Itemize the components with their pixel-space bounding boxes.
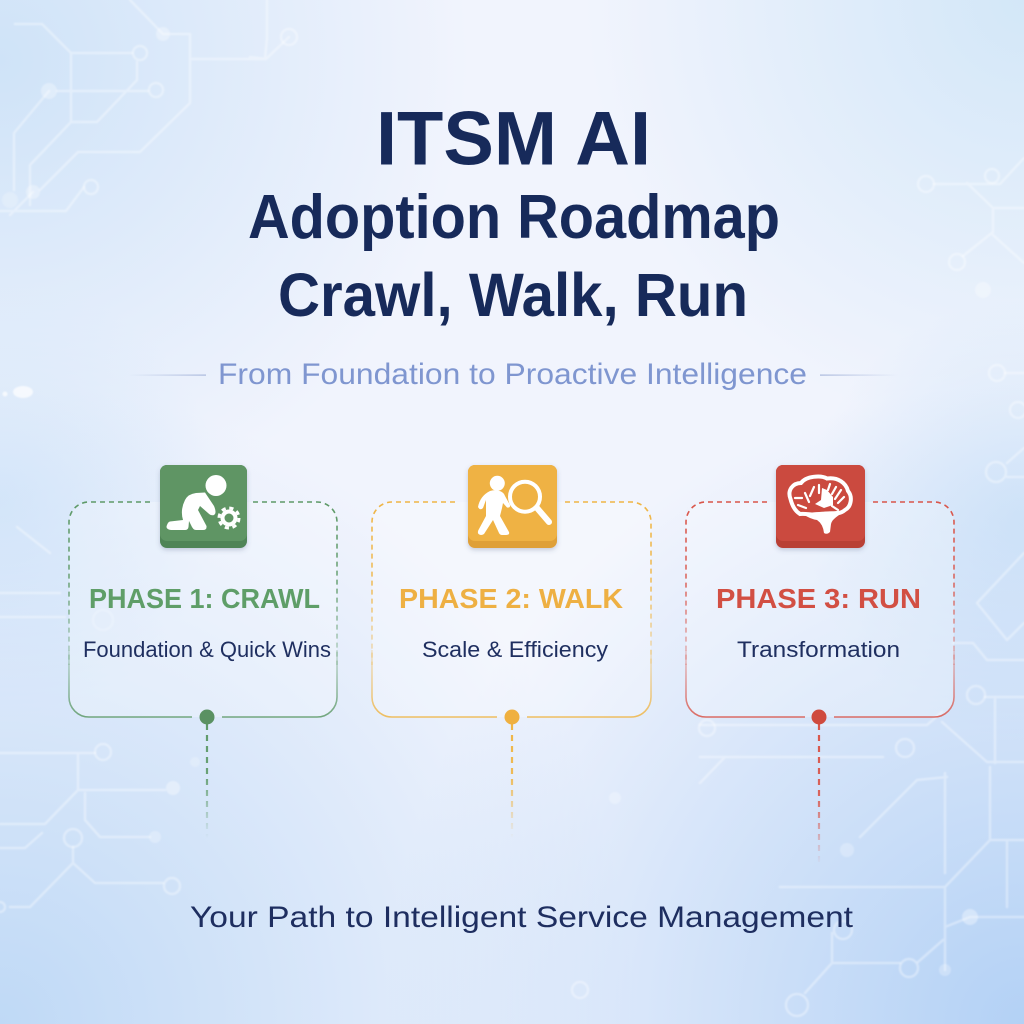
- title line: Adoption Roadmap: Adoption Roadmap: [248, 183, 780, 252]
- title block: [248, 96, 780, 329]
- panel: phase 1 crawl: [69, 465, 337, 838]
- phase 3 heading: PHASE 3: RUN: [716, 583, 921, 614]
- closing tagline: Your Path to Intelligent Service Management: [190, 901, 854, 934]
- phase 1 heading: PHASE 1: CRAWL: [89, 583, 320, 614]
- icon: brain: [776, 465, 865, 548]
- phase 3 description: Transformation: [737, 637, 900, 662]
- panel: phase 2 walk: [372, 465, 651, 838]
- phase 2 description: Scale & Efficiency: [422, 637, 608, 662]
- title line: Crawl, Walk, Run: Crawl, Walk, Run: [278, 261, 748, 329]
- phase 2 connector: [504, 710, 520, 838]
- subtitle text: From Foundation to Proactive Intelligence: [218, 358, 807, 391]
- phase 3 connector: [812, 710, 826, 865]
- phase 2 heading: PHASE 2: WALK: [399, 583, 623, 614]
- icon: walking figure with magnifier: [468, 465, 557, 548]
- title line: ITSM AI: ITSM AI: [376, 96, 651, 182]
- panel: phase 3 run: [686, 465, 954, 865]
- phase 1 description: Foundation & Quick Wins: [83, 637, 331, 662]
- phase 1 connector: [200, 710, 214, 838]
- icon: crawling figure with gear: [160, 465, 247, 548]
